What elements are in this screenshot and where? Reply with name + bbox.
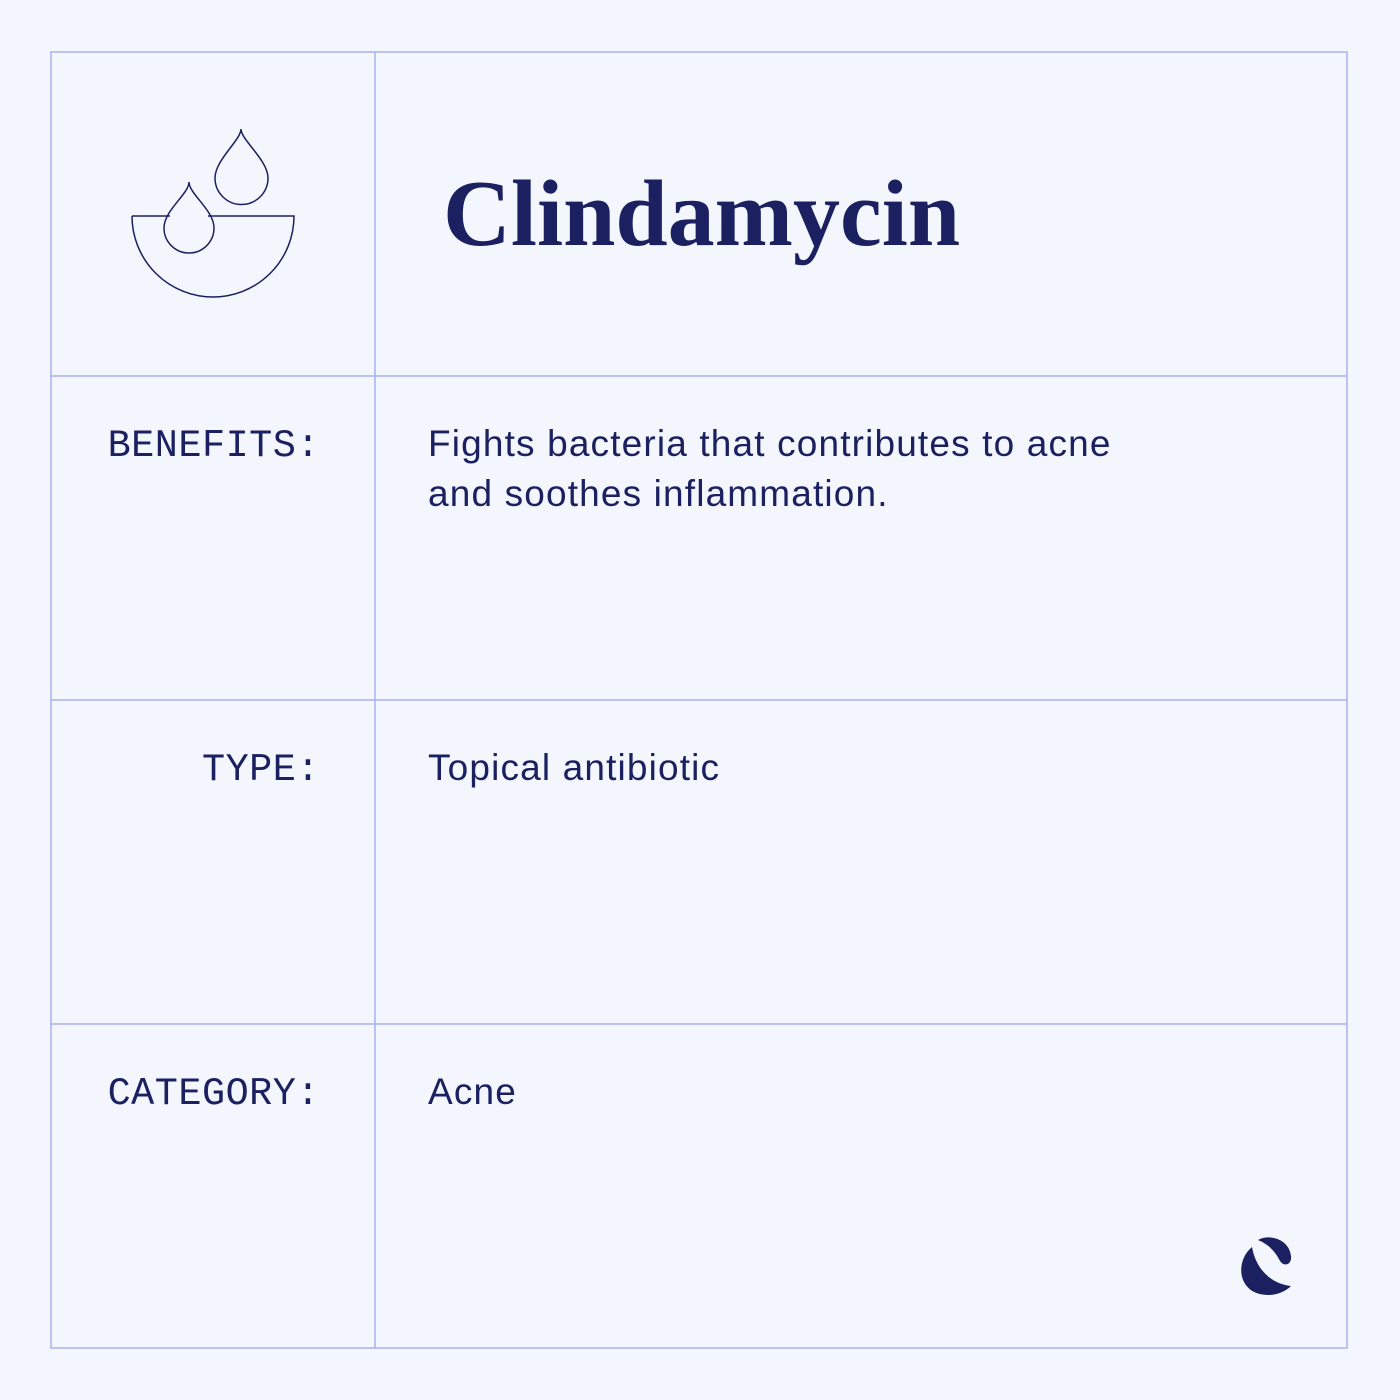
text: benefits: Fights bacteria that contributes to acne <box>428 423 1112 464</box>
text: category: Acne <box>428 1071 517 1112</box>
label: type: TYPE: <box>202 748 320 792</box>
text: benefits: and soothes inflammation. <box>428 473 889 514</box>
text: benefits <box>428 423 1112 514</box>
logo <box>1241 1237 1292 1295</box>
icon: bowl with drops <box>131 129 295 298</box>
label: category: CATEGORY: <box>108 1072 320 1116</box>
label: benefits: BENEFITS: <box>108 424 320 468</box>
text: type: Topical antibiotic <box>428 747 720 788</box>
title: Clindamycin <box>443 162 960 266</box>
